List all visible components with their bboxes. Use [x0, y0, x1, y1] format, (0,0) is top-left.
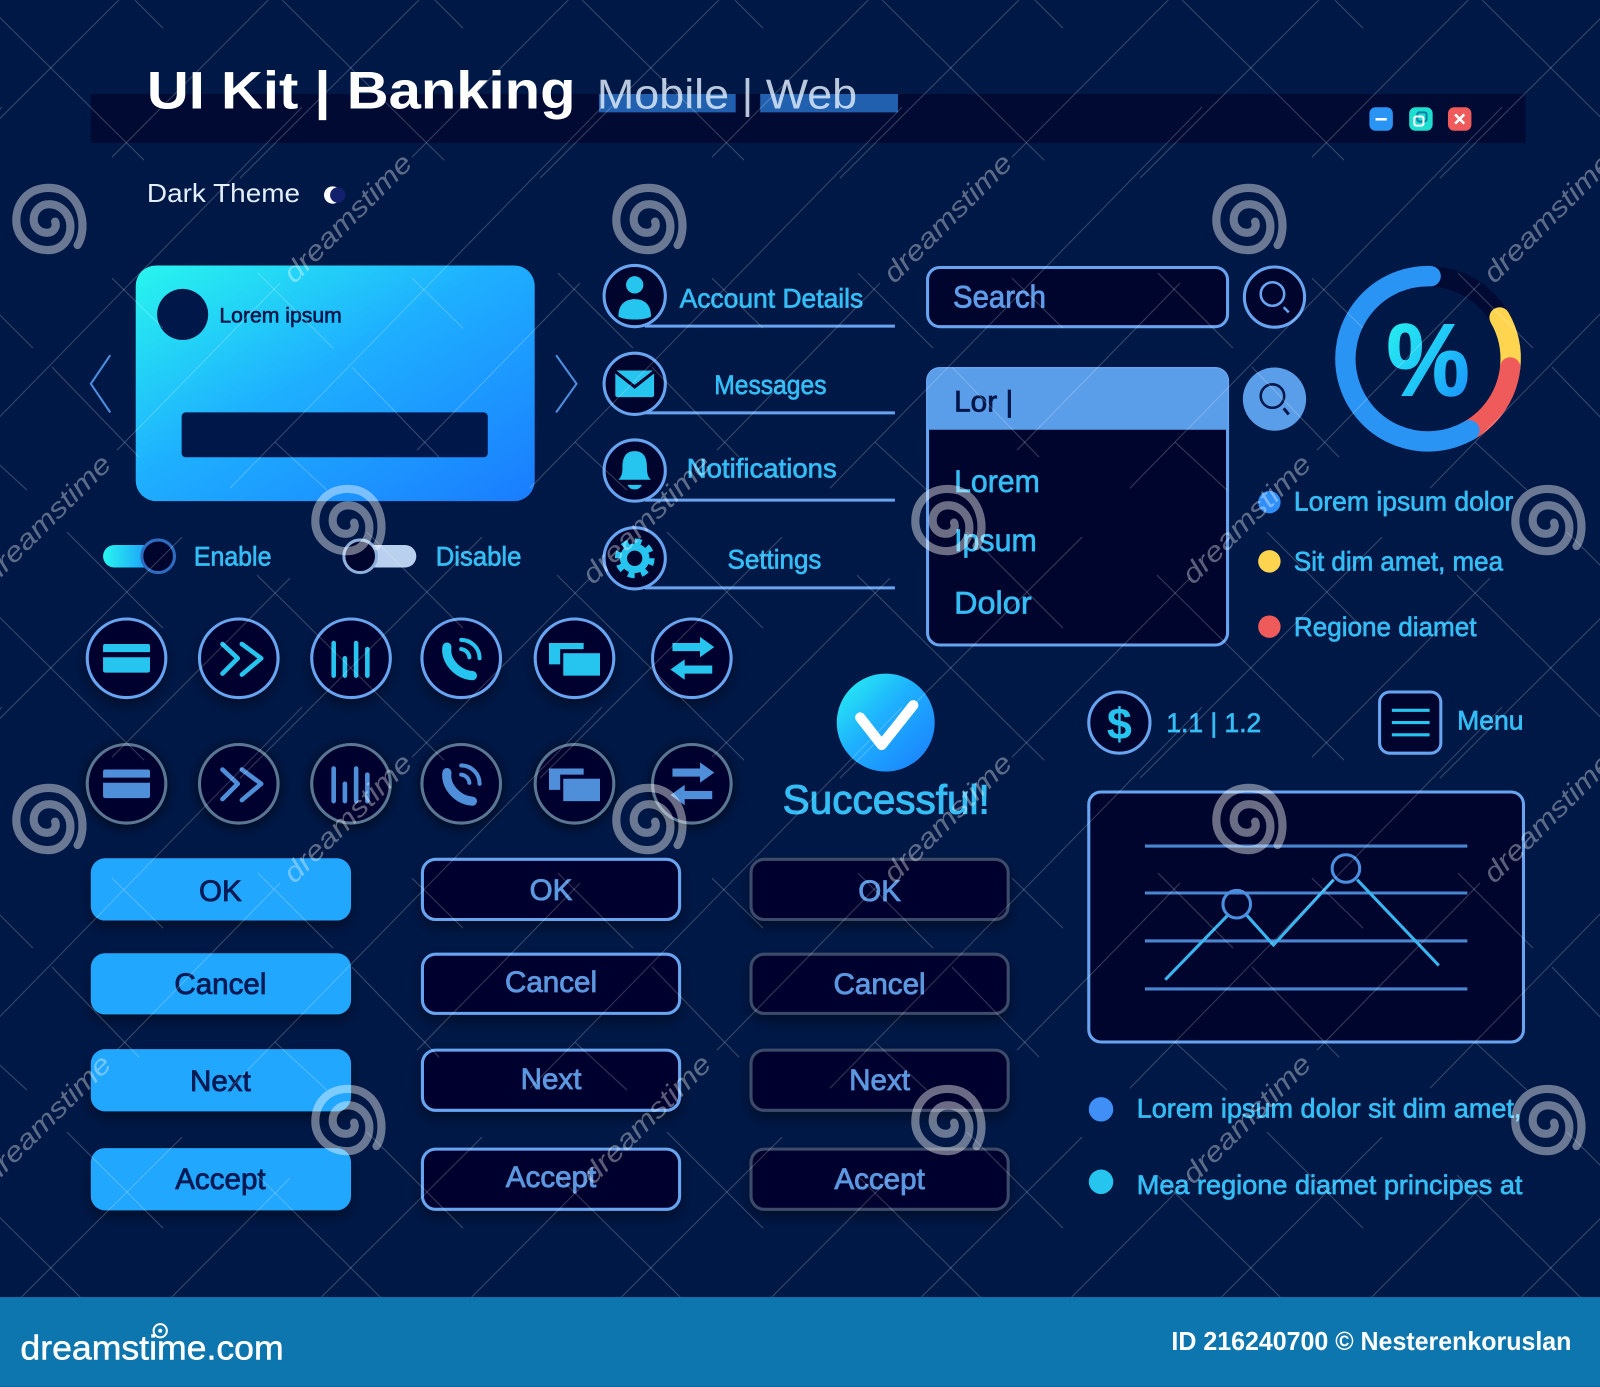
bottom list: Lorem ipsum dolor sit dim amet, [1137, 1093, 1521, 1123]
watermark text: dreamstime [277, 747, 418, 889]
buttons: disabled: OK [858, 875, 901, 908]
donut chart: % [1387, 303, 1469, 417]
watermark text: dreamstime [877, 147, 1018, 289]
buttons: outlined: OK [530, 874, 573, 907]
menu: notifications: Notifications [687, 454, 837, 484]
currency control [1089, 692, 1261, 753]
watermark text: dreamstime [1175, 448, 1317, 590]
icon: search button filled [1243, 367, 1306, 431]
buttons: outlined: Cancel [505, 966, 597, 999]
buttons: primary: OK [199, 875, 242, 908]
watermark text [0, 147, 1600, 1190]
toggle: enable [103, 540, 271, 573]
dropdown: Ipsum [954, 522, 1037, 558]
watermark text: dreamstime [1477, 747, 1600, 889]
bottom list: Mea regione diamet principes at [1137, 1170, 1523, 1200]
panel: bank card [136, 265, 535, 501]
buttons: outlined [422, 859, 680, 1209]
footer logo: dreamstime.com [20, 1329, 284, 1367]
buttons: outlined: Next [521, 1063, 581, 1096]
menu button: Menu [1457, 706, 1523, 736]
watermark text: dreamstime [575, 448, 717, 590]
buttons: disabled: Accept [834, 1163, 925, 1196]
bottom list [1089, 1093, 1523, 1200]
window controls [1369, 107, 1471, 131]
icon row: active [87, 619, 731, 698]
toggle: enable: Enable [194, 541, 271, 571]
buttons: disabled: Next [849, 1064, 910, 1097]
menu: settings [604, 528, 895, 589]
arrow: next [556, 355, 577, 412]
theme label: Dark Theme [147, 180, 300, 208]
buttons: primary [91, 858, 351, 1210]
search field: Search [953, 278, 1046, 314]
dropdown: Dolor [954, 584, 1032, 620]
buttons: primary: Accept [175, 1163, 266, 1196]
buttons: disabled: Cancel [834, 968, 926, 1001]
success badge [837, 674, 935, 772]
subtitle: Mobile | Web [597, 70, 857, 117]
footer credit: ID 216240700 © Nesterenkoruslan [1171, 1328, 1571, 1356]
icon row: inactive [87, 745, 731, 823]
buttons: primary: Next [190, 1065, 251, 1098]
buttons: outlined: Accept [506, 1161, 596, 1194]
menu: settings: Settings [728, 545, 821, 575]
currency control: 1.1 | 1.2 [1166, 708, 1261, 738]
menu: messages [604, 353, 895, 414]
buttons: disabled [751, 859, 1008, 1209]
search field [928, 267, 1228, 327]
toggle: disable: Disable [436, 541, 521, 571]
menu: notifications [604, 440, 895, 501]
success heading: Successful! [783, 776, 990, 822]
toggle: disable [344, 540, 521, 573]
title: UI Kit | Banking [147, 61, 576, 121]
watermark spirals [16, 188, 1581, 1151]
menu button [1380, 692, 1523, 753]
watermark text: dreamstime [1477, 147, 1600, 289]
legend [1258, 486, 1513, 642]
panel: bank card: Lorem ipsum [219, 304, 342, 328]
menu: account details [604, 265, 895, 327]
footer bar [0, 1297, 1600, 1387]
legend: Sit dim amet, mea [1294, 547, 1503, 577]
legend: Regione diamet [1294, 612, 1477, 642]
dropdown [928, 368, 1228, 645]
watermark text: dreamstime [575, 1048, 717, 1190]
icon: search button outline [1244, 267, 1305, 327]
dropdown: Lor | [954, 385, 1013, 418]
arrow: previous [91, 355, 110, 412]
icon: moon [324, 186, 345, 204]
watermark text: dreamstime [1175, 1048, 1317, 1190]
currency control: $ [1107, 698, 1132, 749]
donut chart [1345, 276, 1511, 441]
watermark text: dreamstime [877, 747, 1018, 889]
dropdown: Lorem [954, 463, 1040, 499]
watermark text: dreamstime [277, 147, 418, 289]
title bar [91, 94, 1526, 143]
menu: account details: Account Details [680, 283, 863, 313]
menu: messages: Messages [714, 370, 827, 400]
buttons: primary: Cancel [174, 968, 266, 1001]
line chart panel [1089, 792, 1523, 1042]
legend: Lorem ipsum dolor [1294, 486, 1513, 516]
